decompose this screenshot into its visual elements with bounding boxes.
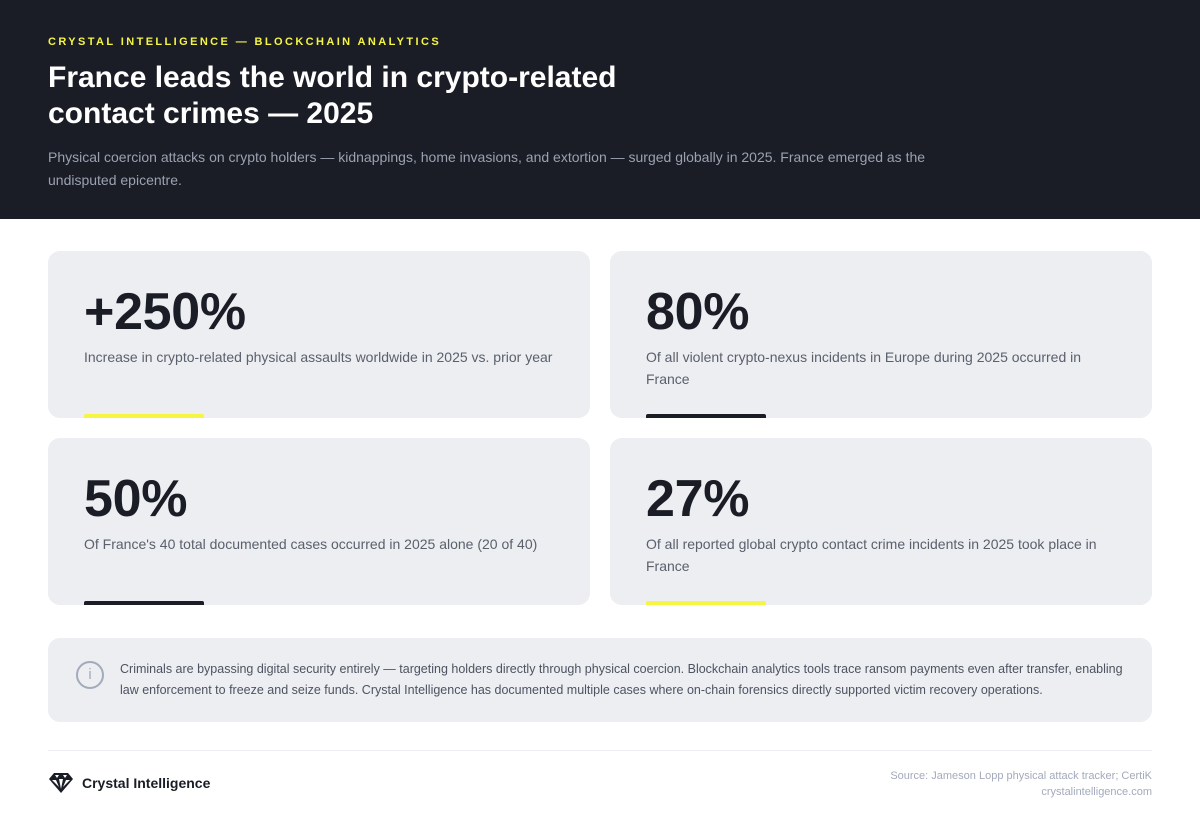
card: +250% [48,251,590,418]
card: 80%: Of all violent crypto-nexus incidents in Europe during 2025 occurred in France [646,349,1081,387]
card: 50% [48,438,590,605]
logo [49,773,210,793]
card: 50%: 50% [84,470,187,528]
callout: info [48,638,1152,722]
card: 27%: 27% [646,470,749,528]
card: 80%: 80% [646,283,749,341]
card: 27%: Of all reported global crypto contact crime incidents in 2025 took place in France [646,536,1097,574]
card: 27% [610,438,1152,605]
icon: info: i [88,666,92,683]
kicker: CRYSTAL INTELLIGENCE — BLOCKCHAIN ANALYTICS [48,36,441,48]
title: France leads the world in crypto-related contact crimes — 2025 [48,61,616,130]
card: +250%: Increase in crypto-related physical assaults worldwide in 2025 vs. prior year [84,349,552,365]
source: Source: Jameson Lopp physical attack tracker; CertiK [890,770,1152,782]
source [890,770,1152,798]
header [0,0,1200,219]
brand name: Crystal Intelligence [82,775,210,791]
subtitle: Physical coercion attacks on crypto holders — kidnappings, home invasions, and extortion — surged globally in 2025. France emerged as the undisputed epicentre. [48,149,925,188]
callout text: Criminals are bypassing digital security entirely — targeting holders directly through physical coercion. Blockchain analytics tools trace ransom payments even after transfer, enabling law enforcement to freeze and seize funds. Crystal Intelligence has documented multiple cases where on-chain forensics directly supported victim recovery operations. [120,662,1123,697]
icon: info [76,661,104,689]
icon: diamond [49,773,73,793]
card: 50%: Of France's 40 total documented cases occurred in 2025 alone (20 of 40) [84,536,537,552]
source: crystalintelligence.com [1041,786,1152,798]
card: 80% [610,251,1152,418]
card: +250%: +250% [84,283,246,341]
